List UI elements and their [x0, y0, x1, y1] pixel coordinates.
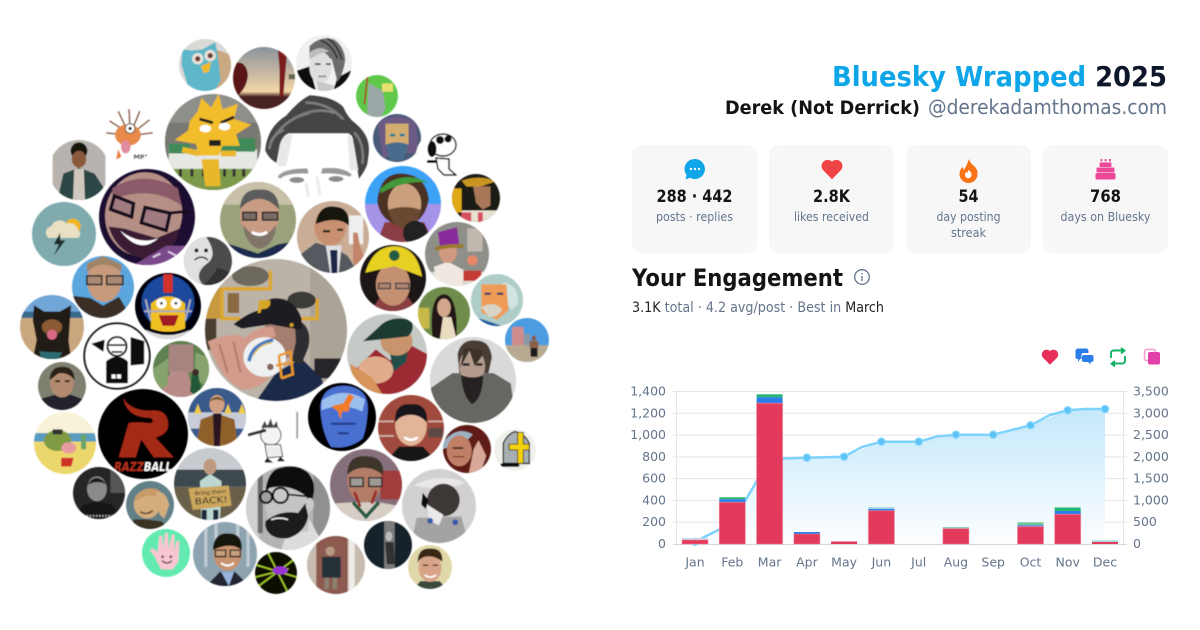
avatar: homer in football helmet [135, 273, 201, 339]
avatar: man in yellow cap [452, 174, 500, 222]
month labels: Mar [758, 554, 782, 570]
avatar: bison in cowboy costume [402, 469, 476, 543]
cumulative line [695, 409, 1105, 542]
bar: Apr [794, 532, 820, 544]
avatar: man with ny cap kissing baby [347, 314, 427, 394]
avatar: mirror selfie [307, 536, 365, 594]
left axis labels: 200 [642, 514, 666, 529]
bar: Aug [943, 527, 969, 544]
avatar: main man with mini helmet [205, 259, 347, 404]
stat value: 288 · 442 [656, 187, 732, 207]
month labels: Jan [684, 554, 705, 570]
month labels [684, 554, 1117, 570]
stat label: likes received [794, 209, 869, 224]
avatar: razzball logo: RAZZBALL [114, 459, 172, 474]
avatar: storm weather icon [32, 202, 96, 266]
avatar: mitre [494, 429, 536, 471]
avatar: smiling man with glasses, purple tint [97, 165, 195, 265]
stat value: 768 [1090, 187, 1121, 207]
panel: posts and replies [632, 145, 757, 253]
avatar: razzball logo [98, 389, 188, 479]
avatar: dog on beach [20, 295, 84, 359]
avatar: man in yellow hard hat [360, 245, 426, 311]
avatar: cartoon old man [471, 274, 523, 326]
chart grid [673, 391, 1127, 544]
stat value: 2.8K [813, 187, 851, 207]
avatar: man in brown suit with stars [188, 388, 246, 446]
bar: Mar [757, 394, 783, 544]
left axis labels: 0 [658, 536, 666, 551]
avatar: man at brick wall [378, 395, 444, 461]
avatar: orange scribble creature [106, 108, 154, 160]
month labels: Nov [1055, 554, 1080, 570]
avatar: raiders badge [84, 323, 150, 389]
avatar: posterized bearded man [373, 114, 421, 162]
avatar: woman in purple hat [425, 222, 489, 286]
stat label second line: streak [951, 225, 987, 240]
avatar: sunset silhouette [233, 47, 295, 109]
stat label: days on Bluesky [1060, 209, 1151, 224]
panel: likes received [769, 145, 894, 253]
avatar: smiling man in suit [193, 522, 257, 586]
avatar: beach selfie with buildings [505, 318, 549, 362]
avatar: reddish face close up [443, 425, 491, 473]
left axis labels [630, 384, 666, 551]
right axis labels: 0 [1133, 536, 1141, 551]
bar: Oct [1018, 522, 1044, 544]
avatar: man pointing finger [297, 201, 369, 273]
cumulative dots [691, 405, 1109, 545]
month labels: Feb [721, 554, 743, 570]
engagement heading: Your Engagement [631, 264, 843, 292]
avatar: man with green hat on blue gradient [365, 166, 441, 245]
avatar: smiling man on cream [408, 545, 452, 589]
left axis labels: 1,000 [630, 427, 666, 442]
avatar: ghost [184, 237, 232, 285]
month labels: Oct [1020, 554, 1041, 570]
engagement chart [630, 384, 1169, 570]
icon: reposts arrows [1111, 348, 1125, 366]
left axis labels: 600 [642, 470, 666, 486]
month labels: Dec [1093, 554, 1117, 570]
stat label: posts · replies [656, 209, 733, 224]
right axis labels: 2,000 [1133, 449, 1169, 464]
avatar: woman in green jacket [53, 140, 105, 200]
month labels: Aug [944, 554, 968, 570]
avatar: vintage boy cartoon [126, 481, 174, 529]
avatar: bearded monochrome man [246, 466, 330, 550]
cumulative area [695, 409, 1105, 544]
left axis labels: 1,200 [630, 406, 666, 420]
avatar: protester with sign [174, 448, 246, 520]
engagement summary: 3.1K total · 4.2 avg/post · Best in March [632, 300, 884, 316]
title: Bluesky Wrapped 2025 [832, 60, 1167, 93]
avatar: furby [179, 39, 231, 91]
bar: May [831, 542, 857, 544]
icon: quotes squares [1144, 350, 1160, 364]
avatar: smiling man with glasses [220, 182, 296, 258]
left axis labels: 1,400 [630, 384, 666, 398]
panel: days on bluesky [1043, 145, 1168, 253]
avatar: woman in garden path [153, 341, 209, 397]
icon: info [855, 270, 869, 284]
icon: speech bubble [684, 159, 705, 180]
avatar: woman with long dark hair [418, 287, 470, 339]
month labels: Jun [871, 554, 891, 570]
right axis labels [1133, 384, 1169, 551]
left axis labels: 400 [642, 492, 666, 508]
month labels: May [831, 554, 858, 570]
icon: birthday cake [1096, 159, 1116, 180]
avatar: black and white woman [296, 35, 352, 91]
stat label: day posting [936, 209, 1000, 224]
avatar: protester with sign: Bring them [195, 489, 227, 497]
user handle: @derekadamthomas.com [928, 95, 1167, 119]
bar: Nov [1055, 508, 1081, 544]
right axis labels: 3,500 [1133, 384, 1169, 398]
avatar: snoopy [415, 132, 458, 181]
avatar: calvin with bat [247, 410, 299, 464]
right axis labels: 1,000 [1133, 492, 1169, 508]
avatar: green wizard cartoon [356, 75, 398, 117]
right axis labels: 3,000 [1133, 406, 1169, 420]
bar: Dec [1092, 540, 1118, 544]
user name: Derek (Not Derrick) [725, 97, 920, 119]
right axis labels: 2,500 [1133, 427, 1169, 442]
bar: Jan [682, 538, 708, 544]
avatar: blue brain with orange dino [308, 383, 376, 451]
avatar: man with glasses in jacket [72, 256, 134, 318]
month labels: Jul [910, 554, 926, 570]
bar: Feb [719, 497, 745, 544]
bars [682, 394, 1118, 544]
chart legend icons [1042, 348, 1160, 366]
icon: likes heart [1042, 350, 1058, 364]
icon: replies bubbles [1076, 348, 1094, 364]
avatar: orange scribble creature: MBBP! [133, 153, 157, 161]
avatar: monochrome man [73, 467, 125, 519]
avatar: dark haired man [38, 362, 86, 410]
stat value: 54 [958, 187, 979, 207]
avatar: man with bloody face [330, 449, 402, 521]
avatar: shaggy man in grey jacket [430, 337, 516, 423]
icon: flame [960, 159, 978, 183]
avatar: sun mascot in stadium [165, 94, 261, 190]
left axis labels: 800 [642, 449, 666, 464]
avatar: dark panel with woman [364, 521, 412, 569]
avatar: protester with sign: BACK! [194, 495, 228, 508]
avatar: illustrated face with swept hair [265, 92, 371, 198]
right axis labels: 1,500 [1133, 470, 1169, 486]
month labels: Apr [796, 554, 819, 570]
bar: Jun [868, 507, 894, 544]
avatar: laser lights [255, 552, 297, 594]
icon: heart [822, 160, 842, 178]
avatar: frog on beach [34, 412, 96, 474]
panel: day posting streak [906, 145, 1031, 253]
right axis labels: 500 [1133, 514, 1157, 529]
month labels: Sep [981, 554, 1005, 570]
avatar: pink hand on mint [142, 529, 190, 577]
avatar cluster [20, 35, 549, 594]
